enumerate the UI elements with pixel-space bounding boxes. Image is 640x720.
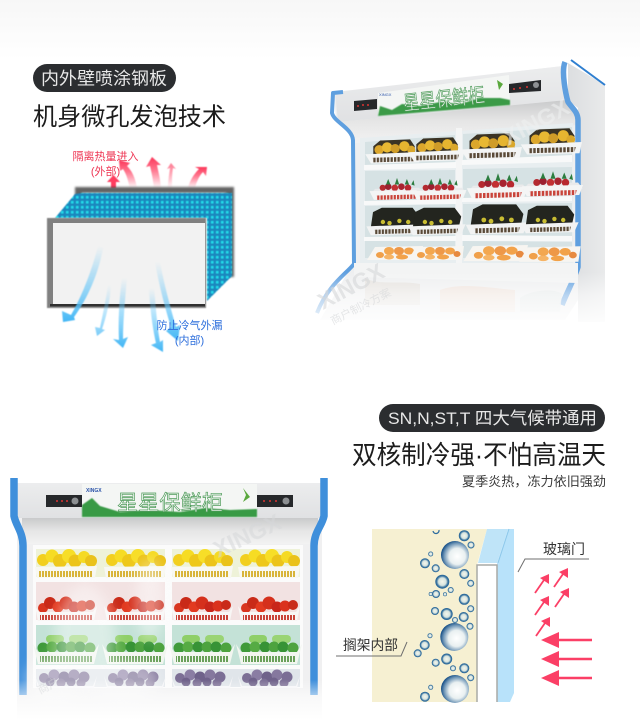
cabinet body (17, 483, 322, 720)
section 2 badge (379, 404, 605, 432)
interior (360, 123, 573, 268)
section 1 title: 机身微孔发泡技术 (33, 103, 226, 131)
shelf row: cucumbers (33, 635, 302, 664)
interior (33, 545, 303, 688)
shelf row: tomatoes (35, 596, 300, 621)
section 2 subtitle: 夏季炎热，冻力依旧强劲 (462, 474, 606, 489)
sign: XINGX (86, 488, 102, 494)
freezer photo 1 (300, 60, 620, 330)
insulation panel diagram (47, 149, 234, 352)
shelf row 2: red fruit (370, 171, 583, 200)
shelf row 4: orange fruit (367, 245, 581, 262)
label: cold leakage (156, 318, 222, 347)
label: cold leakage: (内部) (175, 333, 204, 347)
sign: 星星保鲜柜 (117, 492, 223, 515)
watermark (313, 94, 574, 328)
section 2 badge: SN,N,ST,T 四大气候带通用 (388, 409, 597, 428)
bottom rail (354, 263, 578, 283)
bottom fade (300, 272, 620, 330)
right controller (257, 495, 293, 507)
freezer photo 2 (0, 478, 340, 720)
shelf row 1: yellow fruit (365, 128, 582, 164)
front frame (47, 218, 206, 308)
shelf row 3: dark fruit (366, 204, 579, 235)
dark back frame (75, 187, 234, 277)
valance (22, 518, 318, 544)
pink diagonal arrows (535, 568, 569, 636)
label: heat barrier: 隔离热量进入 (72, 149, 138, 163)
watermark: 商户 (35, 674, 61, 697)
side panel (568, 63, 605, 322)
cabinet front (320, 66, 578, 320)
label: glass door: 玻璃门 (543, 541, 585, 557)
section 2 title: 双核制冷强·不怕高温天 (352, 440, 606, 470)
pink horizontal arrows (541, 632, 592, 686)
red heat arrows (107, 157, 207, 188)
shelf row: yellow peppers (35, 549, 300, 578)
condensation diagram (336, 529, 592, 703)
blue trims (14, 478, 324, 695)
header band (335, 66, 567, 122)
sign: 星星保鲜柜 (402, 84, 486, 115)
left controller (354, 99, 377, 111)
section 1 badge: 内外壁喷涂钢板: 内外壁喷涂钢板 (41, 68, 167, 88)
left controller (46, 495, 82, 507)
watermark: XINGX (313, 258, 389, 314)
label: shelf interior (336, 637, 407, 656)
white inner sheet (53, 223, 205, 304)
header band (17, 483, 322, 518)
blue foam dotted layer (55, 193, 232, 301)
water droplets (414, 530, 474, 703)
white door frame (477, 565, 497, 702)
glass door (478, 529, 508, 563)
sign: XINGX (379, 92, 392, 97)
watermark: XINGX (498, 94, 574, 150)
blue cold air arrows (62, 246, 180, 352)
label: heat barrier (72, 149, 138, 178)
label: heat barrier: (外部) (91, 164, 120, 178)
sign (378, 75, 510, 116)
beige shelf interior (372, 529, 487, 702)
watermark: 商户制冷方案 (328, 285, 393, 328)
bottom fade (0, 680, 340, 720)
shelf edges (364, 155, 572, 241)
label: shelf interior: 搁架内部 (343, 637, 398, 653)
label: glass door (518, 541, 589, 572)
watermark (35, 508, 286, 697)
cold vapor (25, 560, 164, 702)
lower display faded (365, 278, 562, 312)
watermark: XINGX (209, 508, 286, 563)
shelf row: eggplants (35, 670, 300, 688)
label: cold leakage: 防止冷气外漏 (156, 318, 222, 332)
section 1 badge: 内外壁喷涂钢板 (33, 64, 176, 92)
blue trims (317, 62, 578, 313)
page top shading (0, 0, 640, 60)
right controller (509, 80, 541, 93)
sign (82, 484, 257, 517)
